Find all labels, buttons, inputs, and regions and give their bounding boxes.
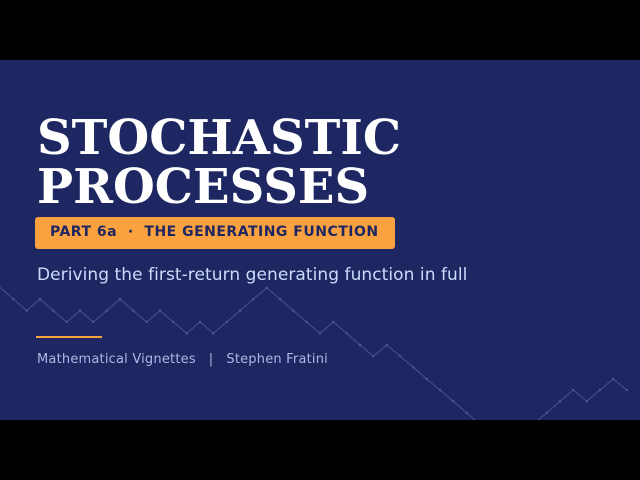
title: STOCHASTIC	[37, 110, 401, 166]
panel: navy title card	[0, 60, 640, 420]
badge text: PART 6a · THE GENERATING FUNCTION	[50, 224, 379, 240]
byline: Mathematical Vignettes | Stephen Fratini	[37, 352, 328, 366]
accent line	[36, 336, 102, 338]
subtitle: Deriving the first-return generating function in full	[37, 265, 467, 285]
chart: random walk line	[0, 286, 628, 420]
badge: part label	[35, 217, 395, 248]
title	[37, 110, 401, 214]
title: PROCESSES	[37, 158, 369, 214]
